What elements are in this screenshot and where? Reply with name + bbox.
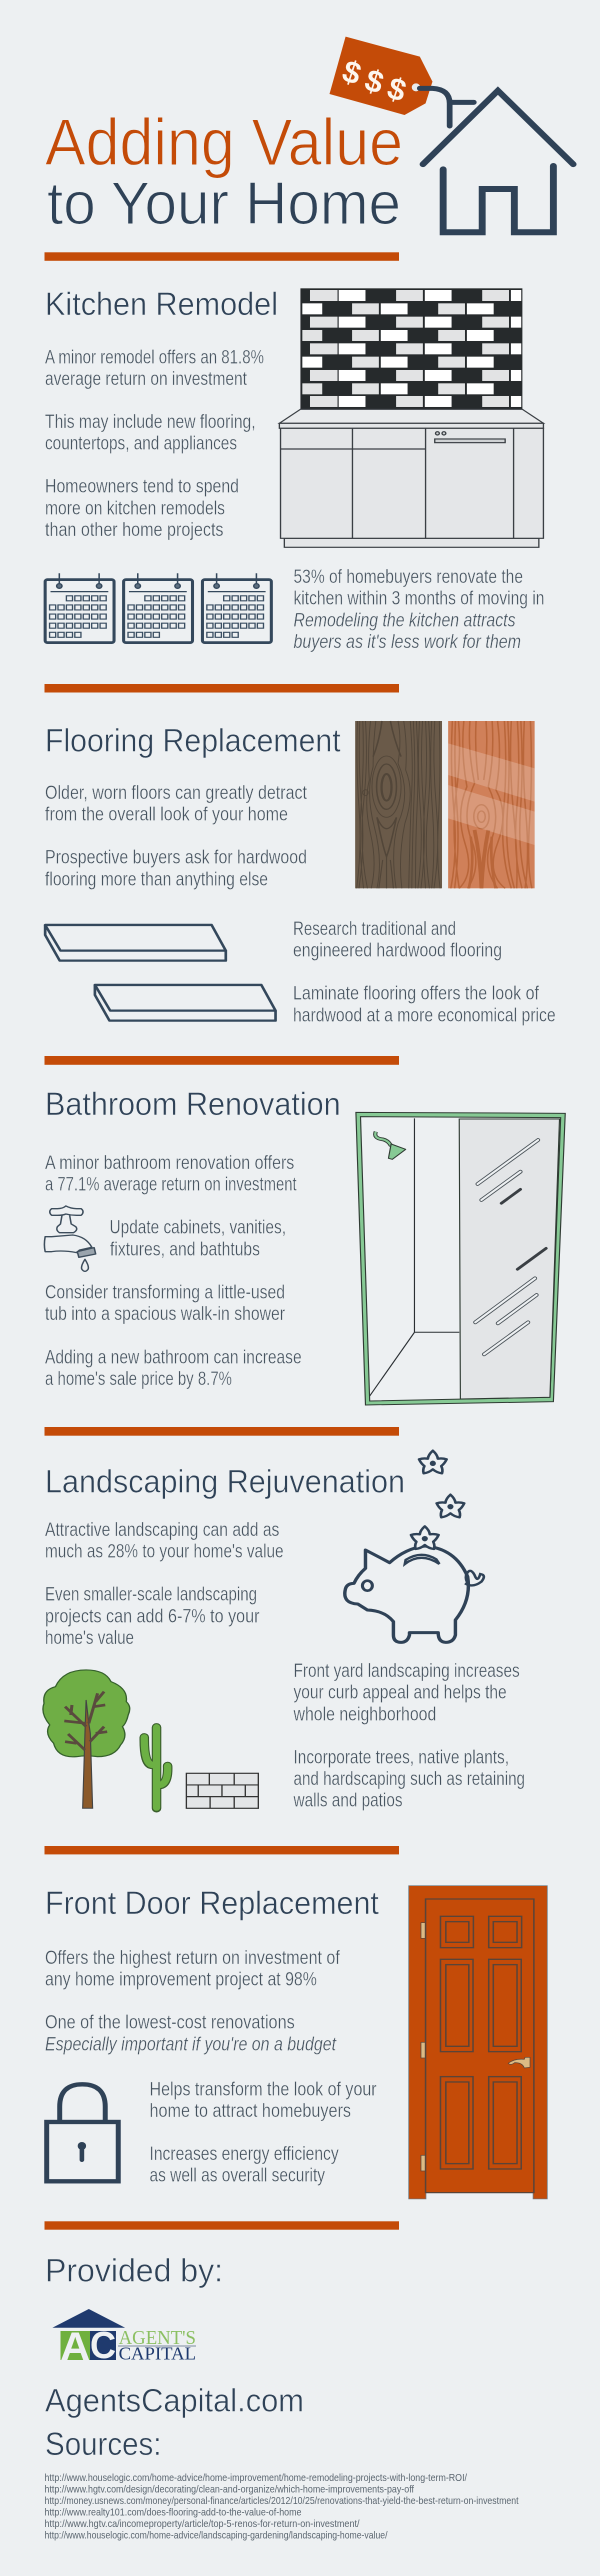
text: source links: http://www.hgtv.ca/incomeproperty/article/top-5-renos-for-return-on-investment/ <box>44 2518 360 2530</box>
text: lowest cost: Especially important if you're on a budget <box>45 2033 337 2055</box>
text: homebuyers renovate: Remodeling the kitchen attracts <box>294 609 516 631</box>
text: highest return: Offers the highest return on investment of <box>45 1947 340 1969</box>
text: hardscaping: walls and patios <box>293 1790 403 1812</box>
price tag dollar signs <box>338 53 410 109</box>
text: research hardwood <box>293 918 502 962</box>
panel: front door replacement <box>45 1885 547 2199</box>
text: kitchen ROI: A minor remodel offers an 81.8% <box>45 346 264 368</box>
text: energy efficiency <box>150 2143 339 2187</box>
text: kitchen spending: Homeowners tend to spend <box>45 476 239 498</box>
text: curb appeal: Front yard landscaping increases <box>294 1660 520 1682</box>
text: kitchen spending <box>45 476 239 541</box>
text: walk-in shower: tub into a spacious walk-in shower <box>45 1303 285 1325</box>
text: landscaping value: Attractive landscaping can add as <box>45 1519 280 1541</box>
logo: Agent's Capital <box>52 2309 196 2369</box>
icon: faucet <box>44 1206 96 1271</box>
text: kitchen includes: countertops, and appliances <box>45 433 237 455</box>
text: sale price: Adding a new bathroom can increase <box>45 1346 302 1368</box>
text: laminate <box>293 983 556 1026</box>
text: energy efficiency: Increases energy efficiency <box>150 2143 339 2165</box>
icon: house <box>423 91 573 232</box>
text: research hardwood: Research traditional and <box>293 918 456 940</box>
price tag dollar signs: $ <box>383 70 410 109</box>
text: worn floors: Older, worn floors can greatly detract <box>45 782 307 804</box>
logo: Agent's Capital: CAPITAL <box>119 2343 196 2363</box>
illustration: light wood swatch <box>448 721 535 888</box>
text: transform look: home to attract homebuyers <box>150 2100 351 2122</box>
text: bathroom ROI: A minor bathroom renovation offers <box>45 1152 294 1174</box>
text: update fixtures: Update cabinets, vanities, <box>110 1217 286 1239</box>
text: curb appeal: whole neighborhood <box>293 1703 436 1725</box>
text: kitchen includes <box>45 411 256 455</box>
text: homebuyers renovate: kitchen within 3 months of moving in <box>294 588 544 610</box>
text: source links: http://money.usnews.com/money/personal-finance/articles/2012/10/25/renovations-that-yield-the-best-return-on-investment <box>44 2495 519 2507</box>
text: homebuyers renovate <box>294 566 544 653</box>
text: bathroom ROI <box>45 1152 297 1196</box>
text: sale price: a home's sale price by 8.7% <box>45 1368 232 1390</box>
text: hardscaping: Incorporate trees, native plants, <box>294 1746 509 1768</box>
text: buyers ask hardwood: flooring more than anything else <box>45 868 268 890</box>
icon: price tag <box>330 37 474 126</box>
text: highest return <box>45 1947 340 1991</box>
text: hardscaping: and hardscaping such as retaining <box>294 1768 525 1790</box>
text: worn floors: from the overall look of your home <box>45 804 288 826</box>
text: transform look <box>150 2078 377 2122</box>
logo: Agent's Capital: AGENT'S <box>119 2327 196 2349</box>
text: highest return: any home improvement project at 98% <box>45 1969 317 1991</box>
text: buyers ask hardwood <box>45 847 307 890</box>
illustration: cactus <box>144 1727 168 1808</box>
text: sale price <box>45 1346 302 1390</box>
text: landscaping value: much as 28% to your home's value <box>45 1541 284 1563</box>
illustration: dark wood swatch <box>355 721 442 888</box>
illustration: brick wall <box>186 1773 258 1808</box>
title <box>45 105 403 237</box>
panel: landscaping rejuvenation <box>43 1451 525 1812</box>
text: source links: http://www.houselogic.com/home-advice/home-improvement/home-remodeling-projects-with-long-term-ROI/ <box>44 2472 467 2484</box>
text: smaller-scale projects: Even smaller-scale landscaping <box>45 1584 257 1606</box>
text: smaller-scale projects: projects can add 6-7% to your <box>45 1605 260 1627</box>
text: laminate: Laminate flooring offers the look of <box>293 983 539 1005</box>
text: kitchen includes: This may include new flooring, <box>45 411 256 433</box>
illustration: shower <box>356 1112 565 1405</box>
text: energy efficiency: as well as overall security <box>150 2165 325 2187</box>
text: hardscaping <box>293 1746 525 1812</box>
text: source links: http://www.houselogic.com/home-advice/landscaping-gardening/landscaping-home-value/ <box>44 2529 388 2541</box>
heading: provided by: Provided by: <box>45 2253 223 2289</box>
text: research hardwood: engineered hardwood flooring <box>293 940 502 962</box>
text: bathroom ROI: a 77.1% average return on investment <box>45 1174 297 1196</box>
text: transform look: Helps transform the look of your <box>150 2078 377 2100</box>
icon: piggy bank with flowers <box>345 1451 484 1642</box>
title: Adding Value <box>45 105 403 179</box>
heading: landscaping rejuvenation: Landscaping Rejuvenation <box>45 1463 405 1499</box>
text: homebuyers renovate: 53% of homebuyers renovate the <box>294 566 523 588</box>
illustration: tree <box>43 1670 130 1808</box>
divider <box>44 1846 399 1854</box>
heading: flooring replacement: Flooring Replacement <box>45 723 341 759</box>
text: curb appeal <box>293 1660 520 1725</box>
illustration: kitchen cabinets <box>279 409 543 547</box>
illustration: front door <box>409 1886 547 2199</box>
text: update fixtures: fixtures, and bathtubs <box>110 1238 260 1260</box>
text: lowest cost <box>45 2012 337 2055</box>
heading: kitchen remodel: Kitchen Remodel <box>45 286 278 322</box>
text: walk-in shower <box>45 1281 285 1325</box>
divider <box>44 1056 399 1065</box>
text: lowest cost: One of the lowest-cost renovations <box>45 2012 295 2034</box>
text: walk-in shower: Consider transforming a little-used <box>45 1281 285 1303</box>
text: smaller-scale projects: home's value <box>45 1627 134 1649</box>
text: kitchen ROI <box>45 346 264 390</box>
text: source links <box>44 2472 519 2541</box>
logo: Agent's Capital: A <box>60 2325 90 2369</box>
text: smaller-scale projects <box>45 1584 260 1649</box>
divider <box>44 684 399 692</box>
icon: padlock <box>47 2084 118 2181</box>
text: homebuyers renovate: buyers as it's less work for them <box>294 631 521 653</box>
illustration: tile backsplash <box>300 288 522 409</box>
heading: sources: Sources: <box>45 2426 162 2462</box>
text: kitchen spending: than other home projects <box>45 519 224 541</box>
text: landscaping value <box>45 1519 284 1563</box>
text: update fixtures <box>110 1217 286 1260</box>
heading: website: AgentsCapital.com <box>45 2383 304 2419</box>
heading: front door replacement: Front Door Replacement <box>45 1885 379 1921</box>
panel: flooring replacement <box>45 721 556 1026</box>
panel: kitchen remodel <box>45 286 544 653</box>
illustration: wood plank one <box>45 925 226 961</box>
divider <box>44 252 399 261</box>
text: source links: http://www.hgtv.com/design/decorating/clean-and-organize/which-home-improvements-pay-off <box>44 2483 414 2495</box>
illustration: wood plank two <box>95 985 276 1021</box>
divider <box>44 1427 399 1436</box>
logo: Agent's Capital: C <box>90 2325 116 2367</box>
text: kitchen spending: more on kitchen remodels <box>45 497 225 519</box>
text: kitchen ROI: average return on investment <box>45 368 247 390</box>
divider <box>44 2221 399 2230</box>
text: source links: http://www.realty101.com/does-flooring-add-to-the-value-of-home <box>44 2507 302 2519</box>
text: buyers ask hardwood: Prospective buyers ask for hardwood <box>45 847 307 869</box>
title: to Your Home <box>47 170 401 237</box>
text: worn floors <box>45 782 307 826</box>
price tag dollar signs: $ <box>338 53 365 92</box>
text: curb appeal: your curb appeal and helps the <box>294 1682 507 1704</box>
price tag dollar signs: $ <box>361 62 388 101</box>
panel: bathroom renovation <box>44 1086 565 1405</box>
heading: bathroom renovation: Bathroom Renovation <box>45 1086 341 1122</box>
icon: three calendars <box>45 573 271 643</box>
